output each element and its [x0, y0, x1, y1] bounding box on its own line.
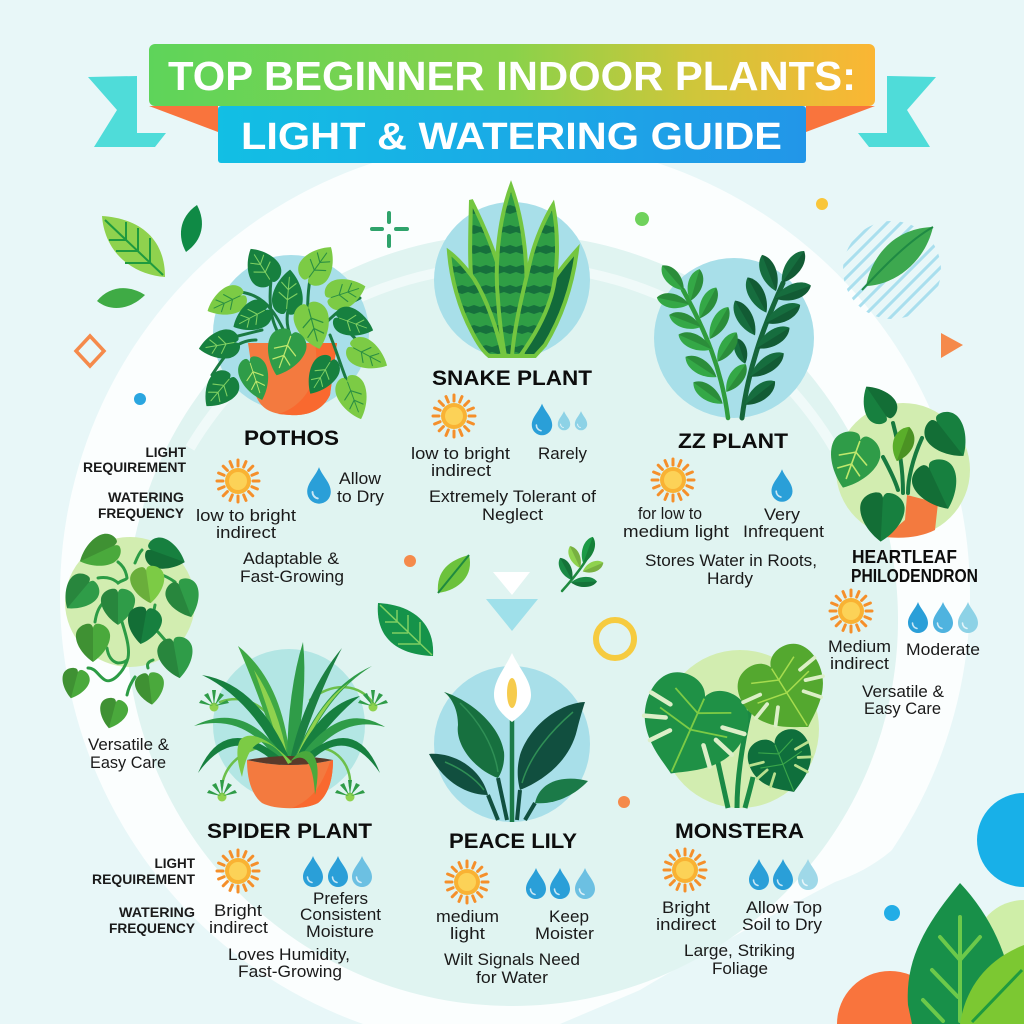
- row labels: light and watering: REQUIREMENT: [92, 872, 196, 887]
- icon: sun: [664, 849, 706, 891]
- icon: sun: [830, 590, 872, 632]
- heading: heartleaf philodendron: [851, 547, 978, 586]
- light text: [411, 445, 510, 480]
- row labels: light and watering: REQUIREMENT: [83, 460, 187, 475]
- illustration: trailing vine: [54, 530, 207, 732]
- note: [429, 488, 596, 524]
- heading: monstera: MONSTERA: [675, 820, 804, 843]
- ribbon fold: right: [806, 106, 875, 132]
- watering text: Rarely: [538, 445, 588, 463]
- watering text: Soil to Dry: [742, 916, 823, 934]
- note: Adaptable &: [243, 550, 339, 568]
- watering text: Very: [764, 506, 801, 524]
- note: [88, 736, 169, 772]
- note: Stores Water in Roots,: [645, 552, 817, 570]
- watering text: Prefers: [313, 890, 368, 908]
- note: [228, 946, 350, 981]
- light text: medium light: [623, 523, 729, 541]
- light text: low to bright: [411, 445, 510, 463]
- light text: indirect: [830, 655, 889, 673]
- decorative corner: bottom right: [837, 793, 1024, 1024]
- heading: heartleaf philodendron: HEARTLEAF: [852, 547, 957, 567]
- row labels: light and watering: [92, 856, 196, 936]
- illustration: spider plant: [194, 642, 388, 808]
- icon: water drops: [526, 868, 595, 899]
- decorative leaves top left: [97, 205, 202, 308]
- watering text: [742, 899, 823, 934]
- light text: Medium: [828, 638, 891, 656]
- illustration: monstera: [623, 635, 844, 808]
- row labels: light and watering: WATERING: [108, 490, 184, 505]
- note: Extremely Tolerant of: [429, 488, 596, 506]
- panel: snake plant: [411, 186, 596, 524]
- note: [862, 683, 944, 718]
- note: [645, 552, 817, 588]
- icon: water drops: [303, 856, 372, 887]
- panel: zz plant: [623, 247, 824, 588]
- illustration: peace lily: [429, 653, 590, 822]
- light text: light: [450, 925, 485, 943]
- heading: pothos: POTHOS: [244, 427, 339, 450]
- note: Versatile &: [88, 736, 169, 754]
- title bar: green to yellow: [149, 44, 875, 106]
- row labels: light and watering: FREQUENCY: [98, 506, 184, 521]
- illustration: pothos: [194, 238, 394, 424]
- icon: water drop: [307, 467, 331, 504]
- panel: pothos: [83, 238, 394, 586]
- light text: [209, 902, 268, 937]
- note: Wilt Signals Need: [444, 951, 580, 969]
- note: Hardy: [707, 570, 754, 588]
- watering text: [535, 908, 595, 943]
- icon: orange triangle: [941, 333, 963, 358]
- icon: orange diamond: [76, 336, 104, 366]
- watering text: Allow Top: [746, 899, 822, 917]
- watering text: Moisture: [306, 923, 374, 941]
- watering text: Moderate: [906, 641, 980, 659]
- light text: Bright: [214, 902, 262, 920]
- light text: [196, 507, 296, 542]
- row labels: light and watering: LIGHT: [146, 445, 187, 460]
- note: [684, 942, 795, 978]
- watering text: Consistent: [300, 906, 381, 924]
- ribbon fold: left: [149, 106, 218, 132]
- note: Large, Striking: [684, 942, 795, 960]
- light text: low to bright: [196, 507, 296, 525]
- icon: green sparkle: [372, 213, 407, 246]
- heading: spider plant: SPIDER PLANT: [207, 820, 372, 843]
- light text: for low to: [638, 505, 702, 523]
- panel: heartleaf philodendron: [820, 378, 980, 718]
- note: Versatile &: [862, 683, 944, 701]
- icon: sun: [446, 861, 488, 903]
- row labels: light and watering: WATERING: [119, 905, 195, 920]
- light text: indirect: [431, 462, 491, 480]
- watering text: Keep: [549, 908, 589, 926]
- icon: water drops: [749, 859, 818, 890]
- row labels: light and watering: LIGHT: [154, 856, 196, 871]
- panel: spider plant: [92, 642, 388, 981]
- icon: water drop: [772, 469, 792, 502]
- illustration: zz plant: [654, 247, 814, 418]
- light text: medium: [436, 908, 499, 926]
- note: Foliage: [712, 960, 768, 978]
- icon: sun: [217, 460, 259, 502]
- note: Easy Care: [864, 700, 941, 718]
- light text: [656, 899, 716, 934]
- panel: peace lily: [429, 653, 595, 987]
- heading: peace lily: PEACE LILY: [449, 830, 577, 853]
- hatched circle with leaf: [843, 221, 941, 319]
- icon: sun: [433, 395, 475, 437]
- icon: water drops: [908, 602, 978, 633]
- icon: sun: [217, 850, 259, 892]
- light text: [623, 505, 729, 541]
- note: [444, 951, 580, 987]
- title line 2: LIGHT & WATERING GUIDE: [241, 116, 782, 158]
- note: Fast-Growing: [238, 963, 342, 981]
- light text: Bright: [662, 899, 710, 917]
- note: Neglect: [482, 506, 543, 524]
- ribbon: left: [88, 76, 166, 147]
- dot: yellow: [816, 198, 828, 210]
- title line 1: TOP BEGINNER INDOOR PLANTS:: [168, 53, 856, 99]
- watering text: [337, 470, 385, 506]
- icon: sun: [652, 459, 694, 501]
- dot: blue: [134, 393, 146, 405]
- heading: snake plant: SNAKE PLANT: [432, 367, 592, 390]
- title bar: blue: [218, 106, 806, 163]
- panel: monstera: [623, 635, 844, 978]
- title banner: [88, 44, 936, 163]
- light text: indirect: [216, 524, 276, 542]
- note: for Water: [476, 969, 549, 987]
- note: Easy Care: [90, 754, 166, 772]
- illustration: heartleaf philodendron: [820, 378, 979, 543]
- watering text: Allow: [339, 470, 381, 488]
- row labels: light and watering: [83, 445, 187, 521]
- note: Fast-Growing: [240, 568, 344, 586]
- panel: trailing vine: [54, 530, 207, 772]
- watering text: [300, 890, 381, 941]
- light text: indirect: [656, 916, 716, 934]
- note: Loves Humidity,: [228, 946, 350, 964]
- center decorations: [378, 535, 900, 921]
- watering text: [743, 506, 824, 541]
- light text: indirect: [209, 919, 268, 937]
- heading: heartleaf philodendron: PHILODENDRON: [851, 566, 978, 586]
- ribbon: right: [858, 76, 936, 147]
- light text: [436, 908, 499, 943]
- dot: green: [635, 212, 649, 226]
- watering text: Moister: [535, 925, 595, 943]
- watering text: Infrequent: [743, 523, 824, 541]
- light text: [828, 638, 891, 673]
- note: [240, 550, 344, 586]
- watering text: to Dry: [337, 488, 385, 506]
- illustration: snake plant: [434, 186, 590, 358]
- row labels: light and watering: FREQUENCY: [109, 921, 195, 936]
- icon: water drops: [532, 404, 587, 435]
- heading: zz plant: ZZ PLANT: [678, 430, 788, 453]
